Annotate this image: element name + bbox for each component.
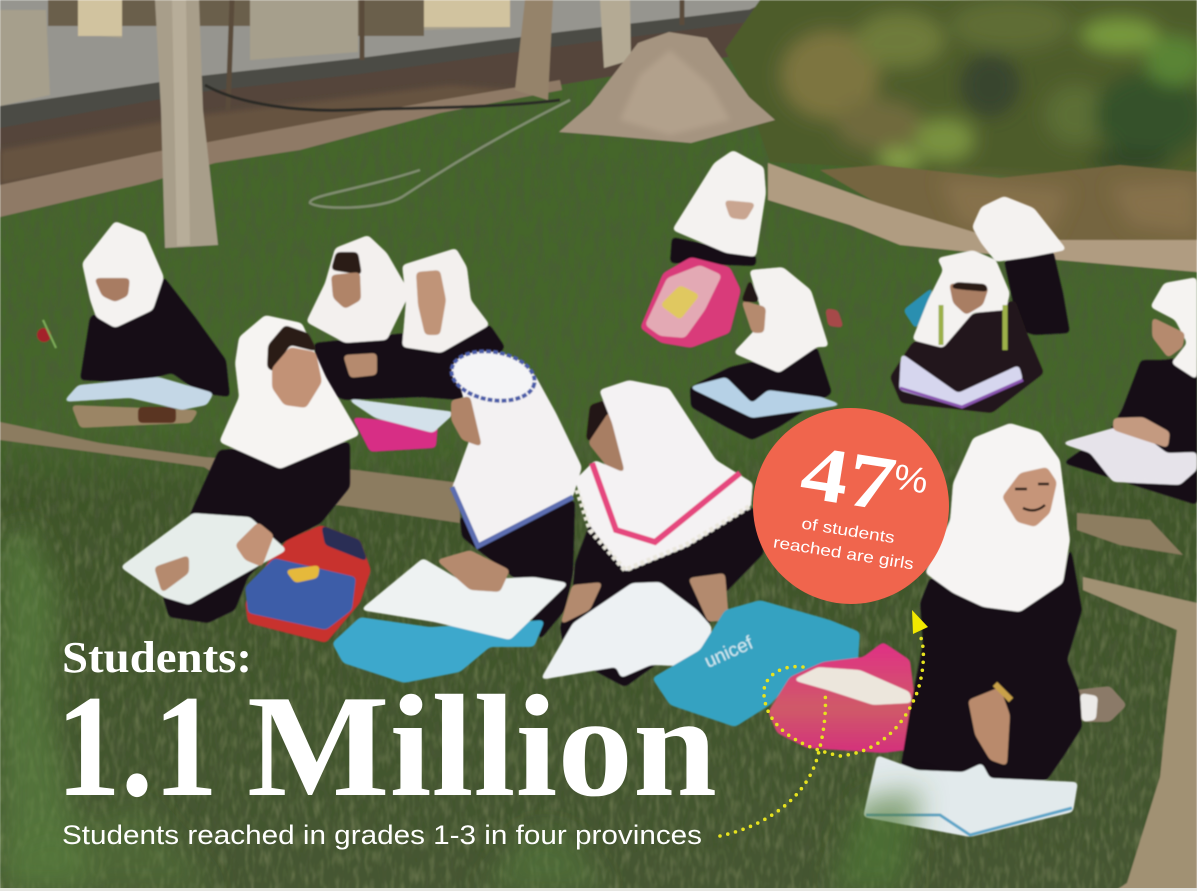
dirt path top right xyxy=(768,163,1197,272)
lace border xyxy=(577,490,752,570)
hair xyxy=(586,398,616,445)
soil band xyxy=(0,0,770,217)
grey pavement xyxy=(0,0,770,108)
book xyxy=(345,398,456,433)
right hand xyxy=(235,522,274,567)
building blocks xyxy=(0,0,510,106)
backpack: teal unicef xyxy=(652,600,860,727)
dark backing of buildings xyxy=(48,0,424,36)
rock xyxy=(559,32,775,143)
body xyxy=(560,507,764,687)
soil shading xyxy=(0,85,520,185)
blue bag xyxy=(332,617,545,683)
tree trunk middle xyxy=(515,0,553,100)
body xyxy=(690,347,832,440)
blurred foreground grass xyxy=(0,525,920,891)
hair xyxy=(267,325,318,372)
students: back centre pair xyxy=(306,235,505,452)
arrowhead xyxy=(912,610,928,634)
left hand xyxy=(154,555,189,593)
scarf xyxy=(912,250,1010,348)
bottom edge line xyxy=(0,888,1197,891)
face xyxy=(588,410,628,473)
hands xyxy=(436,550,510,592)
student: front centre with blue-trimmed scarf xyxy=(332,345,582,683)
book xyxy=(63,377,214,410)
foliage patches xyxy=(780,0,1197,172)
callout: 47 percent of students reached are girls: of students xyxy=(800,516,896,547)
body xyxy=(460,500,575,640)
straps xyxy=(941,305,1005,350)
callout: 47 percent of students reached are girls: % xyxy=(891,456,931,501)
foot xyxy=(1075,686,1127,722)
callout: 47 percent of students reached are girls xyxy=(753,408,949,604)
student: front right smiling xyxy=(863,423,1127,837)
big number: 1.1 Million: 1.1 xyxy=(56,665,218,827)
student: top centre with backpack xyxy=(640,150,766,348)
dotted arrow line xyxy=(720,638,923,836)
body xyxy=(1063,355,1197,505)
big number: 1.1 Million xyxy=(56,665,717,827)
body xyxy=(900,543,1082,782)
scarf xyxy=(925,423,1070,612)
book xyxy=(1060,428,1197,485)
face xyxy=(949,283,989,315)
scarf trim xyxy=(452,487,573,546)
red flower xyxy=(37,320,56,348)
backpack xyxy=(245,525,371,643)
student: back left xyxy=(63,221,230,428)
bodies xyxy=(314,325,505,400)
backpack pouch xyxy=(245,558,356,630)
pink bag xyxy=(352,417,438,452)
face xyxy=(94,278,130,302)
body xyxy=(1004,250,1070,335)
eyes and smile xyxy=(1015,484,1049,510)
student: front left with backpack xyxy=(120,315,371,643)
bracelet xyxy=(995,684,1011,700)
scarf xyxy=(972,196,1067,262)
tree trunk left xyxy=(155,0,218,248)
face xyxy=(1002,467,1057,527)
front row of students xyxy=(120,315,1127,837)
heading: Students: Students: xyxy=(62,633,252,682)
dirt patch right xyxy=(1077,513,1183,555)
face xyxy=(272,347,322,408)
hands xyxy=(1113,417,1170,448)
body xyxy=(670,237,756,266)
student: front centre with pink-trimmed scarf xyxy=(540,380,764,687)
student: far back right xyxy=(972,196,1070,335)
pink ribbon xyxy=(592,463,740,542)
hand xyxy=(343,353,377,378)
dirt path right xyxy=(1083,577,1197,891)
student: right edge xyxy=(1060,277,1197,505)
back row of students xyxy=(63,150,1197,505)
callout: 47 percent of students reached are girls: reached are girls xyxy=(772,534,915,573)
face xyxy=(451,396,482,447)
left face xyxy=(331,272,361,309)
thin stems xyxy=(228,0,682,110)
cap xyxy=(447,345,539,407)
hose xyxy=(205,85,560,110)
cushion xyxy=(71,405,199,428)
foliage base xyxy=(725,0,1197,200)
body xyxy=(80,277,230,397)
backpack toy xyxy=(285,565,320,583)
scarf xyxy=(219,315,360,469)
grass light blades xyxy=(0,454,1197,888)
dirt path across field xyxy=(0,422,460,523)
scarf xyxy=(82,221,164,328)
book xyxy=(863,755,1078,837)
hands xyxy=(560,582,603,625)
book xyxy=(688,377,844,418)
caption: Students reached in grades 1-3 in four provinces xyxy=(62,820,702,850)
backpack: pink xyxy=(768,642,915,753)
bag contents xyxy=(792,667,912,705)
backpack print xyxy=(645,265,722,338)
body xyxy=(890,300,1044,413)
hands xyxy=(968,687,1010,766)
face xyxy=(741,300,766,333)
teal pack xyxy=(903,285,935,330)
book xyxy=(899,353,1023,408)
scarf xyxy=(672,150,766,257)
right scarf xyxy=(402,248,490,353)
student: right middle xyxy=(890,250,1044,413)
big number: 1.1 Million: Million xyxy=(247,665,717,827)
scarf xyxy=(575,380,753,572)
left scarf xyxy=(306,235,410,343)
callout: 47 percent of students reached are girls: 47 xyxy=(795,427,902,528)
scarf xyxy=(733,267,829,373)
tree trunk right xyxy=(600,0,631,68)
body xyxy=(156,442,350,623)
book xyxy=(120,513,287,605)
shoe xyxy=(825,308,844,328)
right face xyxy=(416,270,446,335)
book xyxy=(360,558,569,640)
pale path below soil xyxy=(0,80,562,217)
soil under foliage xyxy=(820,165,1197,245)
backpack xyxy=(640,257,741,348)
scarf xyxy=(1150,277,1197,380)
bag label: unicef xyxy=(701,632,757,673)
left hair xyxy=(331,252,362,275)
scarf xyxy=(452,367,582,547)
face xyxy=(1152,317,1185,358)
book xyxy=(540,582,712,680)
dark kerb xyxy=(0,8,765,128)
student: centre right xyxy=(688,267,844,440)
face xyxy=(724,200,756,220)
